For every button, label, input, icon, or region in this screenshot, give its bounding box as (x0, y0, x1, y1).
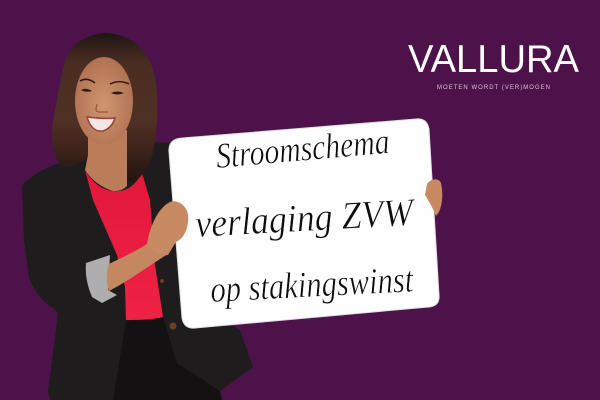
panel: whiteboard (169, 119, 439, 328)
jacket (22, 142, 253, 400)
right fingers on board (425, 179, 442, 216)
nose (96, 104, 108, 112)
person holding whiteboard (22, 33, 253, 400)
left hand on board (147, 201, 188, 255)
eyes (81, 89, 124, 94)
forearm (107, 244, 168, 291)
jacket buttons (160, 279, 176, 330)
face (75, 57, 133, 145)
text: op stakingswinst: op stakingswinst (209, 259, 416, 311)
red blouse (85, 170, 163, 320)
hair back (52, 33, 158, 182)
smile (87, 117, 115, 131)
wordmark: VALLURA (408, 38, 579, 81)
black pants (113, 317, 222, 400)
heading: Stroomschema: Stroomschema (214, 121, 391, 176)
eyebrows (80, 79, 129, 84)
rolled sleeve cuff (86, 255, 117, 303)
logo: Vallura (408, 38, 579, 91)
tagline: MOETEN WORDT (VER)MOGEN (437, 85, 550, 91)
text: verlaging ZVW: verlaging ZVW (194, 191, 417, 246)
neck and chest (85, 130, 127, 191)
